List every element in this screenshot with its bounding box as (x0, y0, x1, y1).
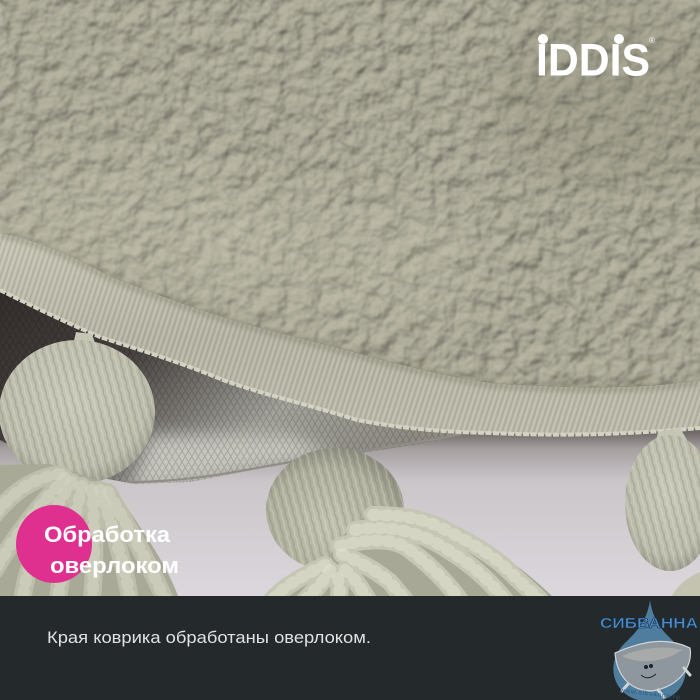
tassel threads: left (0, 464, 178, 600)
water drop (613, 600, 686, 700)
logo: Sibvanna (600, 600, 698, 700)
brand name: СИБВАННА (600, 615, 698, 632)
overlock binding band (0, 233, 700, 435)
shag pile (0, 0, 700, 410)
logo: IDDIS: ® (649, 36, 655, 45)
light floor background (0, 425, 700, 596)
pink circle badge (16, 505, 92, 583)
badge heading: оверлоком (50, 553, 179, 578)
bath tub (615, 641, 690, 697)
bottom dark bar (0, 596, 700, 700)
tassel ball: left (0, 332, 155, 484)
caption text: Края коврика обработаны оверлоком. (47, 628, 371, 647)
badge heading: Обработка (44, 522, 171, 547)
logo: IDDIS: IDDIS (536, 34, 650, 86)
tassel ball: right (625, 428, 700, 596)
rubber mesh backing (0, 285, 470, 492)
tassel ball: centre (266, 448, 404, 572)
tassel threads: centre (266, 507, 552, 600)
